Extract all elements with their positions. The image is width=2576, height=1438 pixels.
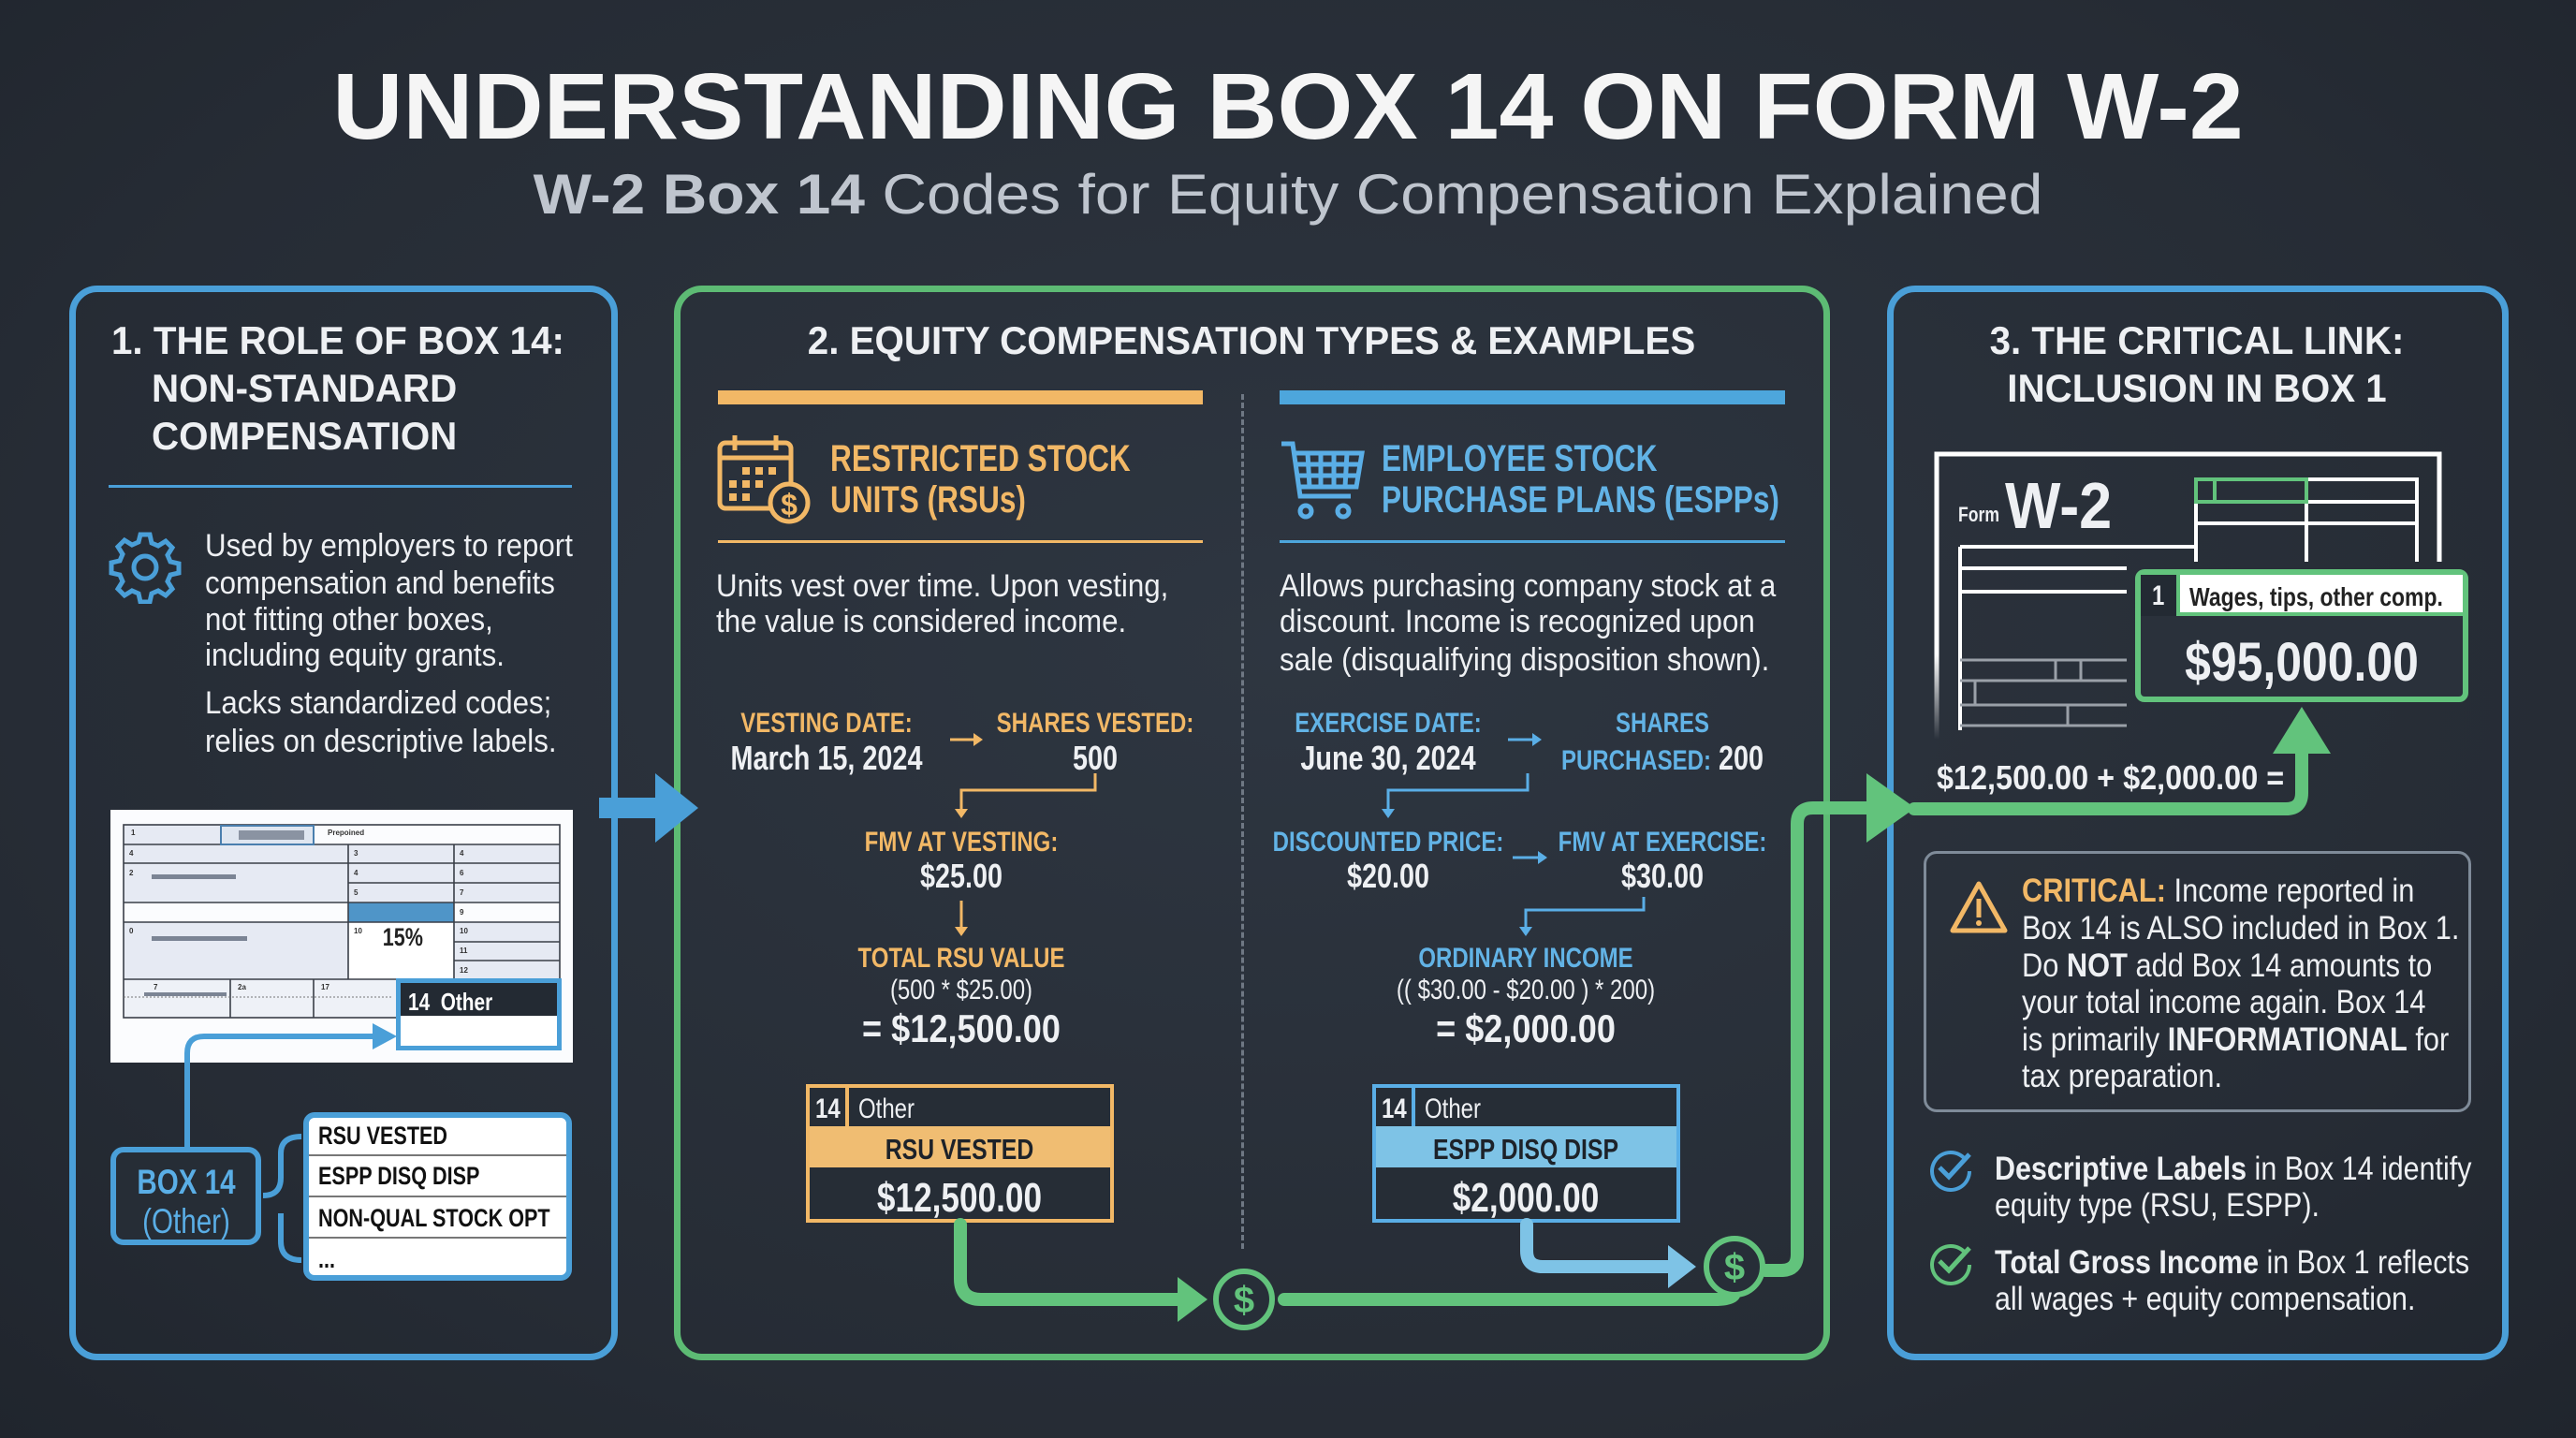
- list: box 14 labels: NON-QUAL STOCK OPT: [318, 1204, 550, 1232]
- panel 3 heading: [1990, 318, 2404, 410]
- ESPP calculation: EXERCISE DATE:: [1295, 708, 1482, 739]
- W-2 form illustration: 15%: [383, 924, 423, 952]
- callout: critical warning: is primarily INFORMATIONAL for: [2022, 1021, 2449, 1058]
- box 14 ESPP example: [1372, 1084, 1680, 1223]
- ESPP calculation: = $2,000.00: [1436, 1006, 1616, 1050]
- RSU calculation: TOTAL RSU VALUE: [858, 943, 1064, 974]
- callout: box 1 wages: Wages, tips, other comp.: [2189, 582, 2443, 611]
- W-2 form illustration: 3: [354, 849, 359, 858]
- RSU calculation: VESTING DATE:: [740, 708, 913, 739]
- title: UNDERSTANDING BOX 14 ON FORM W-2: [332, 54, 2244, 159]
- box 14 RSU example: 14: [815, 1093, 841, 1124]
- box 14 ESPP example: Other: [1425, 1093, 1481, 1124]
- W-2 form illustration: 10: [460, 927, 468, 935]
- text block: box 14 description: [205, 528, 573, 759]
- callout: critical warning: Do NOT add Box 14 amounts to: [2022, 947, 2432, 984]
- box 14 ESPP example: $2,000.00: [1453, 1175, 1599, 1221]
- ESPP calculation: DISCOUNTED PRICE:: [1273, 827, 1503, 858]
- ESPP calculation: June 30, 2024: [1300, 739, 1476, 777]
- checklist item: descriptive labels: Descriptive Labels in Box 14 identify: [1995, 1151, 2471, 1187]
- box 14 RSU example: [806, 1084, 1114, 1223]
- box 14 label: (Other): [142, 1202, 230, 1240]
- green flow RSU: [960, 749, 2302, 1299]
- text block: box 14 description: not fitting other boxes,: [205, 602, 493, 638]
- callout: box 14 other on form: [396, 978, 562, 1050]
- text: ESPP description: [1280, 568, 1777, 678]
- RSU connectors: [950, 740, 1095, 931]
- W-2 form illustration: 6: [460, 869, 464, 877]
- form W-2 label: [1958, 469, 2112, 542]
- callout: box 1 wages: [2135, 569, 2468, 702]
- icon: gear: [109, 532, 182, 604]
- heading: RSUs: UNITS (RSUs): [830, 479, 1026, 521]
- list: box 14 labels: [303, 1112, 572, 1281]
- box 14 label: BOX 14: [137, 1163, 236, 1201]
- callout: critical warning: tax preparation.: [2022, 1058, 2222, 1094]
- checklist item: descriptive labels: equity type (RSU, ESPP).: [1995, 1187, 2320, 1224]
- checklist item: total gross income: all wages + equity compensation.: [1995, 1281, 2415, 1317]
- W-2 form illustration: 4: [460, 849, 464, 858]
- ESPP calculation: FMV AT EXERCISE:: [1559, 827, 1766, 858]
- ESPP connectors: [1388, 740, 1644, 931]
- panel 3 heading: 3. THE CRITICAL LINK:: [1990, 318, 2404, 362]
- panel 2 heading: 2. EQUITY COMPENSATION TYPES & EXAMPLES: [808, 318, 1695, 362]
- box 14 ESPP example: 14: [1382, 1093, 1407, 1124]
- heading: ESPPs: [1382, 438, 1779, 521]
- ESPP calculation: [1273, 708, 1766, 1050]
- W-2 form illustration: 7: [154, 983, 158, 991]
- ESPP calculation: $20.00: [1347, 857, 1429, 895]
- equation: $12,500.00 + $2,000.00 =: [1937, 758, 2284, 797]
- RSU calculation: (500 * $25.00): [890, 975, 1032, 1005]
- RSU calculation: March 15, 2024: [731, 739, 922, 777]
- W-2 form illustration: 11: [460, 946, 468, 955]
- checklist item: descriptive labels: [1930, 1151, 2471, 1224]
- box 14 RSU example: RSU VESTED: [886, 1133, 1033, 1166]
- box 14 RSU example: $12,500.00: [877, 1175, 1042, 1221]
- panel 1 heading: COMPENSATION: [152, 414, 457, 458]
- W-2 form illustration: 12: [460, 966, 468, 975]
- RSU calculation: FMV AT VESTING:: [865, 827, 1058, 858]
- RSU calculation: 500: [1073, 739, 1118, 777]
- panel 1 heading: [111, 318, 564, 458]
- checklist item: total gross income: Total Gross Income in Box 1 reflects: [1995, 1244, 2469, 1281]
- W-2 form illustration: [110, 810, 573, 1063]
- panel 1 heading: 1. THE ROLE OF BOX 14:: [111, 318, 564, 362]
- arrow: form connector: [187, 1036, 376, 1260]
- RSU calculation: $25.00: [920, 857, 1003, 895]
- icon: calendar with dollar: [717, 435, 811, 524]
- list: box 14 labels: ...: [318, 1245, 335, 1273]
- list: box 14 labels: RSU VESTED: [318, 1122, 447, 1150]
- W-2 form illustration: 9: [460, 908, 464, 917]
- form W-2 label: W-2: [2005, 469, 2112, 542]
- W-2 form illustration: 17: [321, 983, 329, 991]
- callout: box 1 wages: 1: [2152, 580, 2164, 611]
- text: ESPP description: Allows purchasing company stock at a: [1280, 568, 1776, 604]
- heading: RSUs: [830, 438, 1131, 521]
- icon: shopping cart: [1281, 442, 1365, 519]
- icon: dollar circles: $: [1724, 1247, 1745, 1288]
- W-2 form illustration: 10: [354, 927, 362, 935]
- panel: critical link: [1887, 286, 2509, 1360]
- text: RSU description: Units vest over time. Upon vesting,: [716, 568, 1168, 604]
- W-2 form illustration: 1: [131, 829, 136, 837]
- text block: box 14 description: Lacks standardized codes;: [205, 685, 551, 721]
- RSU calculation: [731, 708, 1193, 1050]
- icon: warning: [1951, 882, 2007, 932]
- icon: calendar with dollar: $: [781, 488, 798, 521]
- ESPP calculation: SHARES: [1616, 708, 1709, 739]
- heading: ESPPs: EMPLOYEE STOCK: [1382, 438, 1657, 479]
- panel: role of box 14: [69, 286, 618, 1360]
- icon: dollar circles: [1216, 1239, 1763, 1328]
- ESPP calculation: ORDINARY INCOME: [1418, 943, 1633, 974]
- panel: equity compensation types: [674, 286, 1830, 1360]
- text block: box 14 description: including equity grants.: [205, 638, 505, 673]
- text: RSU description: the value is considered income.: [716, 604, 1126, 639]
- W-2 form illustration: 2a: [238, 983, 246, 991]
- panel 1 heading: NON-STANDARD: [152, 366, 457, 410]
- callout: critical warning: [1924, 851, 2471, 1112]
- text: ESPP description: sale (disqualifying disposition shown).: [1280, 642, 1769, 678]
- text: RSU description: [716, 568, 1168, 639]
- box 14 RSU example: Other: [858, 1093, 915, 1124]
- RSU calculation: = $12,500.00: [862, 1006, 1061, 1050]
- subtitle: W-2 Box 14 Codes for Equity Compensation Explained: [534, 163, 2042, 226]
- text: ESPP description: discount. Income is recognized upon: [1280, 604, 1755, 639]
- RSU calculation: SHARES VESTED:: [997, 708, 1193, 739]
- icon: dollar circles: $: [1234, 1280, 1254, 1321]
- box 14 label: [110, 1147, 261, 1245]
- ESPP calculation: PURCHASED: 200: [1561, 739, 1764, 777]
- checklist item: total gross income: [1930, 1244, 2469, 1317]
- list: box 14 labels: ESPP DISQ DISP: [318, 1162, 479, 1190]
- W-2 form illustration: 4: [354, 869, 359, 877]
- text block: box 14 description: Used by employers to report: [205, 528, 573, 564]
- callout: critical warning: Box 14 is ALSO included in Box 1.: [2022, 910, 2459, 946]
- callout: box 14 other on form: 14 Other: [408, 988, 492, 1016]
- callout: critical warning: your total income again. Box 14: [2022, 984, 2425, 1020]
- box 14 ESPP example: ESPP DISQ DISP: [1433, 1133, 1618, 1166]
- W-2 form illustration: 7: [460, 888, 464, 897]
- W-2 form illustration: Prepoined: [328, 829, 364, 837]
- ESPP calculation: (( $30.00 - $20.00 ) * 200): [1397, 975, 1655, 1005]
- W-2 form illustration: 5: [354, 888, 359, 897]
- text block: box 14 description: compensation and benefits: [205, 565, 555, 601]
- ESPP calculation: $30.00: [1621, 857, 1704, 895]
- callout: box 1 wages: $95,000.00: [2185, 632, 2419, 693]
- form W-2 label: Form: [1958, 503, 1999, 526]
- W-2 form illustration: 4: [129, 849, 134, 858]
- panel 3 heading: INCLUSION IN BOX 1: [2007, 366, 2387, 410]
- W-2 form illustration: 2: [129, 869, 134, 877]
- heading: RSUs: RESTRICTED STOCK: [830, 438, 1131, 479]
- heading: ESPPs: PURCHASE PLANS (ESPPs): [1382, 479, 1779, 521]
- arrow: panel 1 to panel 2: [599, 773, 698, 843]
- W-2 form illustration: 0: [129, 927, 134, 935]
- callout: critical warning: CRITICAL: Income reported in: [2022, 873, 2414, 909]
- text block: box 14 description: relies on descriptive labels.: [205, 724, 557, 759]
